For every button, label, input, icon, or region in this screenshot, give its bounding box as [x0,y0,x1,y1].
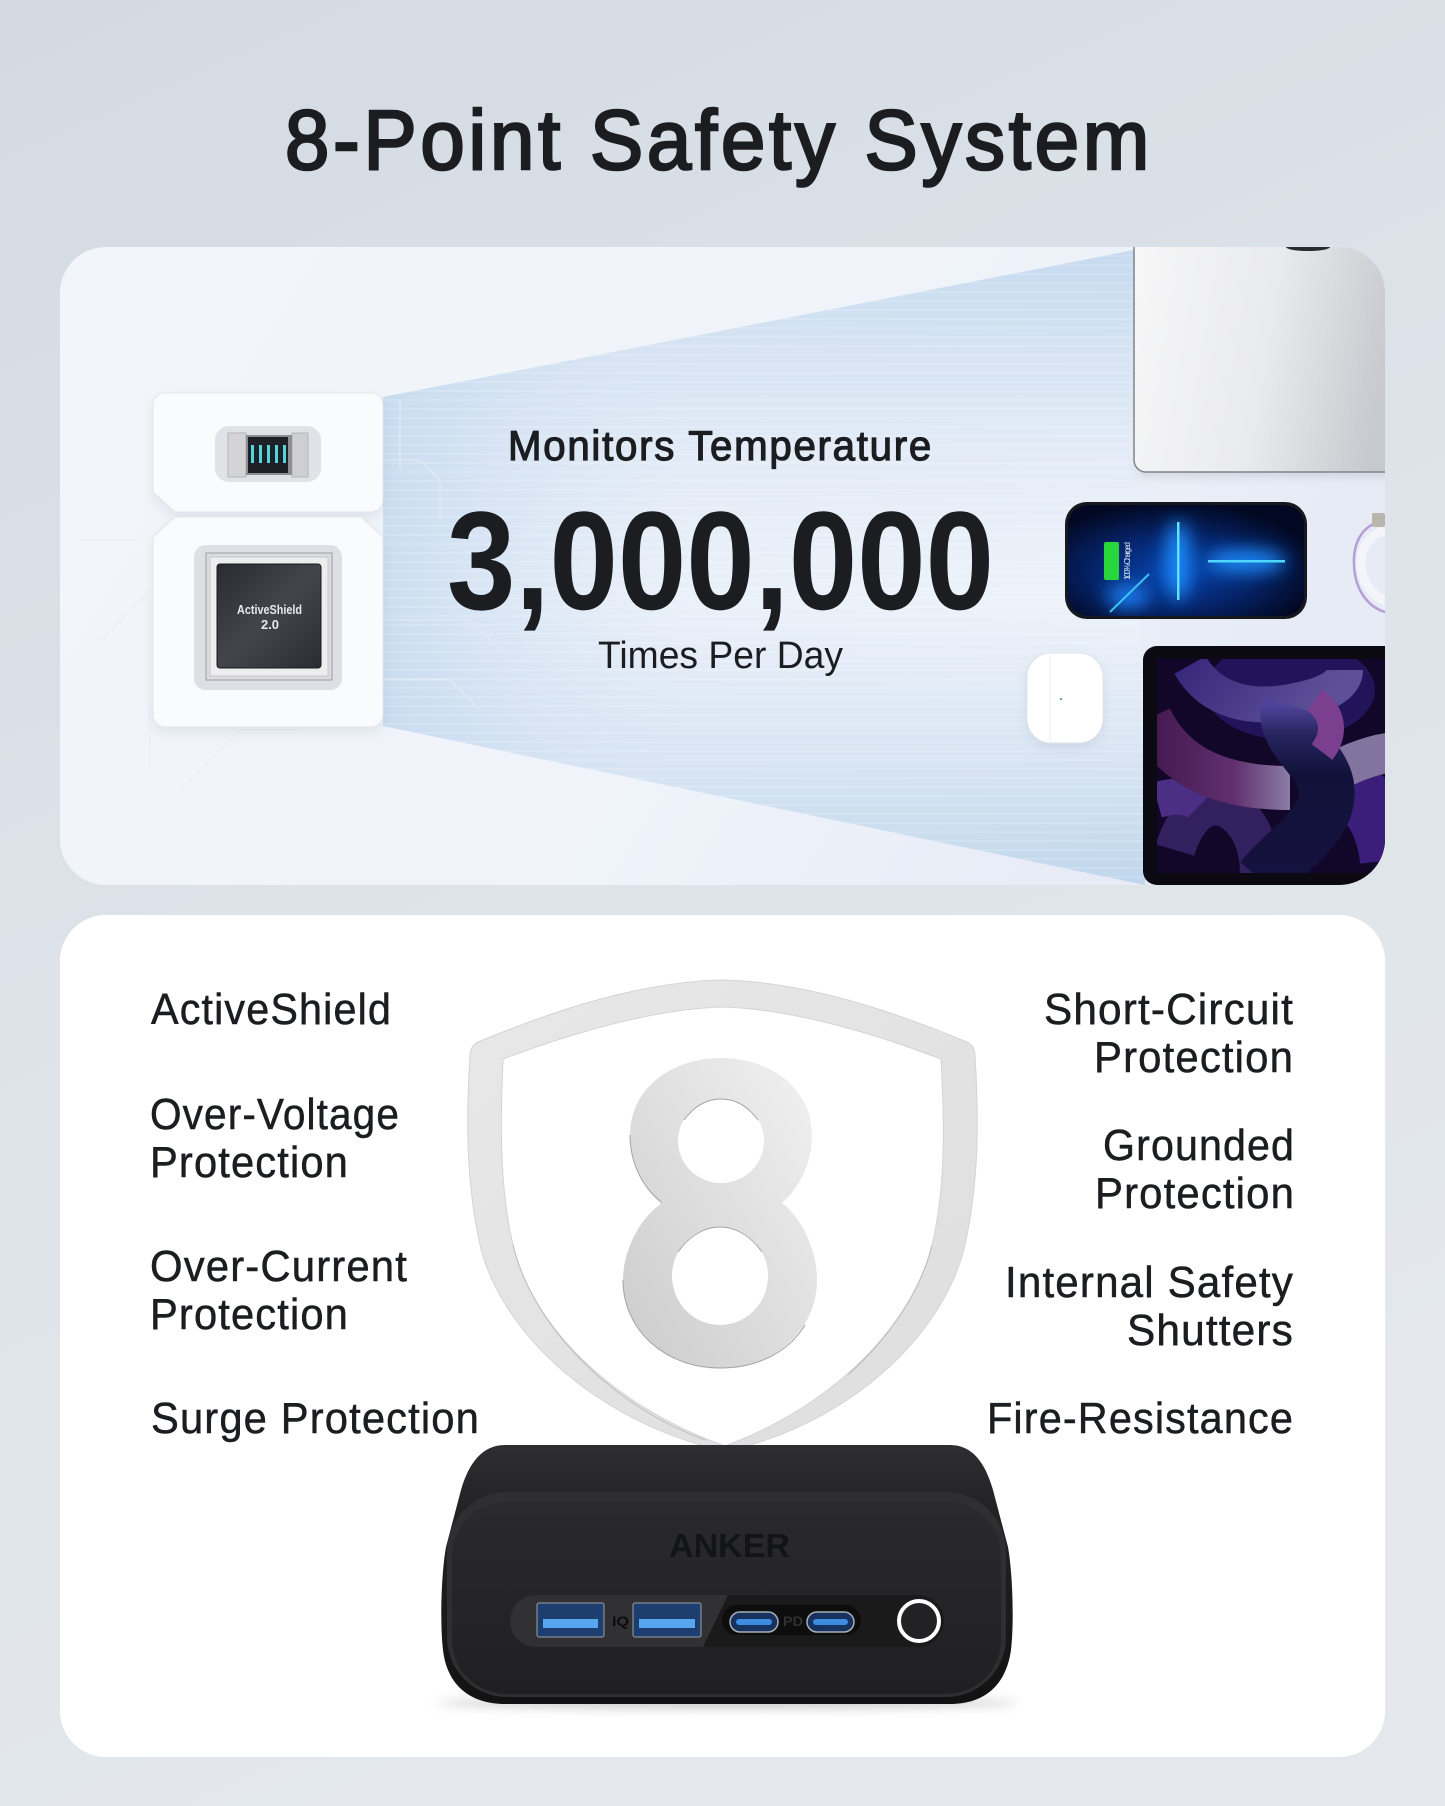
feature list: right column: Grounded [1103,1121,1295,1170]
title: 8-Point Safety System [285,93,1153,187]
feature list: right column: Internal Safety [1005,1258,1294,1307]
numeral 8 [623,1058,817,1368]
port strip [510,1595,944,1647]
usb-a ports: IQ [612,1613,629,1629]
icon: phone [1065,502,1307,619]
feature list: right column: Short-Circuit [1044,985,1294,1034]
panel: temperature monitoring [60,230,1413,885]
feature list: left column: Protection [150,1290,349,1339]
usb-a ports [537,1603,701,1637]
usb-c ports [722,1605,861,1635]
feature list: left column [150,985,480,1443]
icon: shield with 8 [468,980,977,1447]
feature list: left column: Surge Protection [151,1394,480,1443]
monitoring chip cards [80,393,500,790]
feature list: left column: Protection [150,1138,349,1187]
feature list: right column: Shutters [1127,1306,1294,1355]
feature list: right column: Fire-Resistance [987,1394,1294,1443]
icon: tablet [1143,646,1385,885]
icon: earbuds case [1027,653,1103,743]
caption: times per day: Times Per Day [598,635,843,677]
light beam from chip to devices [383,250,1145,885]
icon: watch [1354,513,1385,612]
heading: monitors temperature: Monitors Temperature [508,422,933,469]
product: power strip charger [437,1445,1017,1708]
card: ActiveShield chip: 2.0 [261,617,279,632]
feature list: right column: Protection [1094,1033,1294,1082]
icon: phone: 100% Charged [1123,542,1132,580]
feature list: left column: ActiveShield [151,985,392,1034]
icon: laptop [1133,247,1385,479]
panel: safety features [60,915,1385,1757]
feature list: left column: Over-Current [150,1242,408,1291]
logo: ANKER [669,1527,790,1564]
feature list: right column [987,985,1295,1443]
shield outline [468,980,977,1447]
usb-c ports: PD [783,1613,803,1629]
big number: 3,000,000 [447,482,994,639]
card: sensor [153,393,383,512]
card: ActiveShield chip [153,517,383,727]
card: ActiveShield chip: ActiveShield [237,602,302,617]
feature list: left column: Over-Voltage [150,1090,400,1139]
feature list: right column: Protection [1095,1169,1295,1218]
power button ring [899,1601,939,1641]
